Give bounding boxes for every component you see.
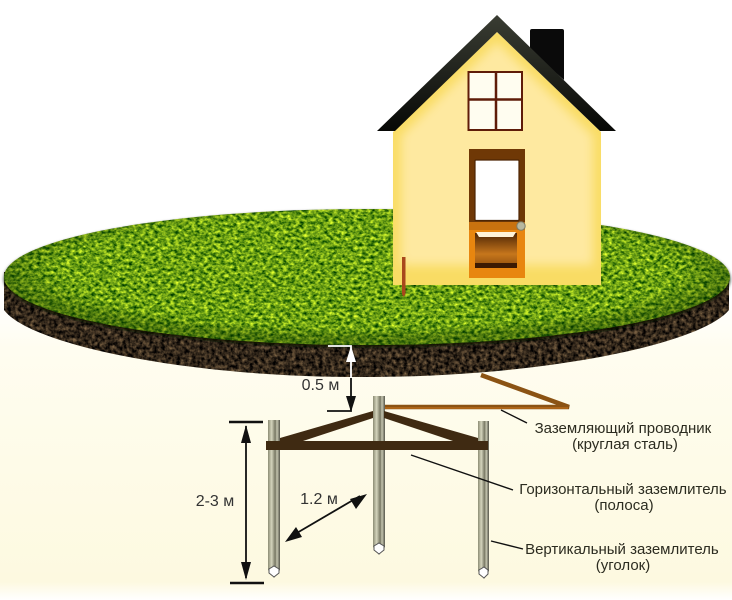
label 1.2 m: 1.2 м — [300, 491, 338, 508]
chimney — [530, 29, 564, 80]
door knob — [517, 222, 525, 230]
grounding conductor — [385, 375, 569, 408]
label 2-3 m: 2-3 м — [196, 493, 234, 510]
dimension: 1.2 m — [285, 491, 367, 542]
label: vertical electrode: (уголок) — [596, 557, 650, 574]
leader lines — [411, 410, 527, 549]
horizontal electrode strips — [266, 411, 488, 450]
house — [377, 15, 616, 285]
grass surface — [4, 209, 730, 345]
vertical electrodes — [268, 396, 489, 579]
dimension: 2-3 m — [196, 422, 264, 583]
ground disc — [4, 209, 730, 377]
house wall — [393, 32, 601, 285]
label: grounding conductor: (круглая сталь) — [572, 436, 678, 453]
roof — [377, 15, 616, 131]
straight strip — [266, 441, 488, 450]
label: horizontal electrode: (полоса) — [594, 497, 654, 514]
electrode left — [268, 420, 280, 578]
label: vertical electrode: Вертикальный заземлитель — [525, 541, 719, 558]
electrode middle — [373, 396, 385, 555]
grass shadow — [4, 211, 730, 347]
soil layer — [4, 272, 729, 377]
dimension: 0.5 m — [302, 346, 356, 412]
grass rim shade — [4, 209, 730, 345]
door glass — [475, 160, 519, 220]
small rod above ground — [402, 257, 406, 297]
electrode right — [478, 421, 489, 579]
window — [468, 72, 522, 130]
door — [469, 149, 525, 278]
door panel — [475, 233, 517, 268]
label 0.5 m: 0.5 м — [302, 377, 339, 394]
label: grounding conductor: Заземляющий проводник — [535, 420, 712, 437]
label: horizontal electrode: Горизонтальный заземлитель — [519, 481, 727, 498]
right diagonal strip — [384, 411, 478, 441]
left diagonal strip — [280, 411, 373, 441]
